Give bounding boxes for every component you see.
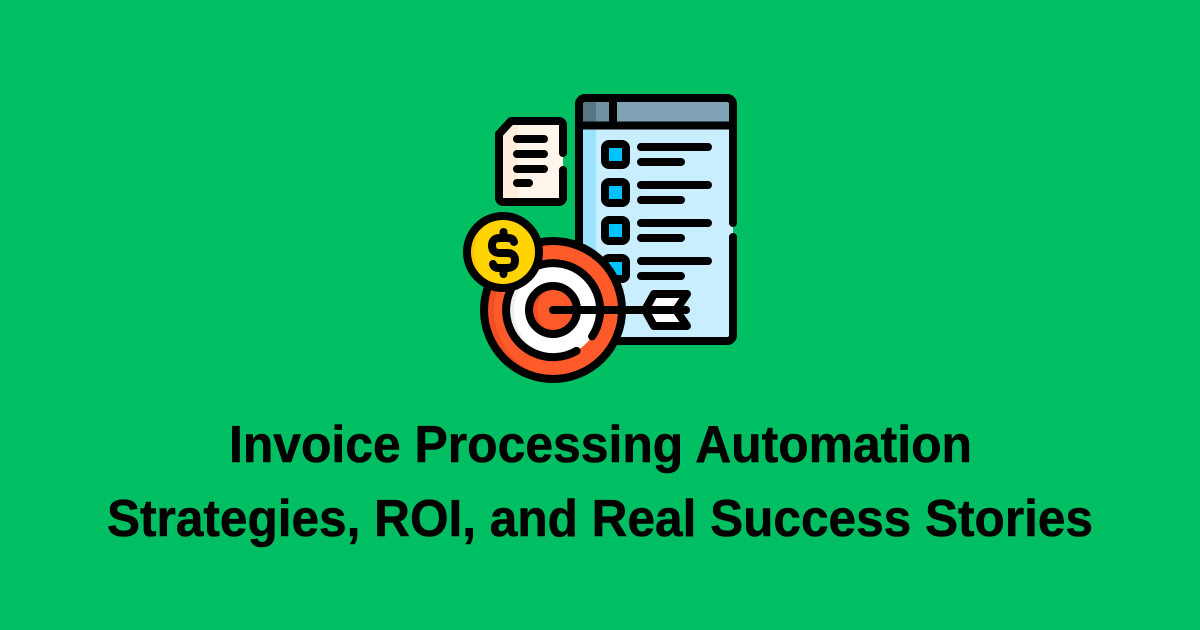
title line 2: Strategies, ROI, and Real Success Stories [107, 490, 1093, 548]
icon: target with arrow [484, 241, 687, 379]
icon: checklist document [579, 98, 733, 341]
title line 1: Invoice Processing Automation [229, 416, 972, 474]
title [107, 416, 1093, 548]
icon: dollar coin [467, 216, 546, 288]
icon: small invoice page [499, 121, 563, 202]
checklist rows [605, 144, 708, 279]
arrow [553, 294, 687, 326]
